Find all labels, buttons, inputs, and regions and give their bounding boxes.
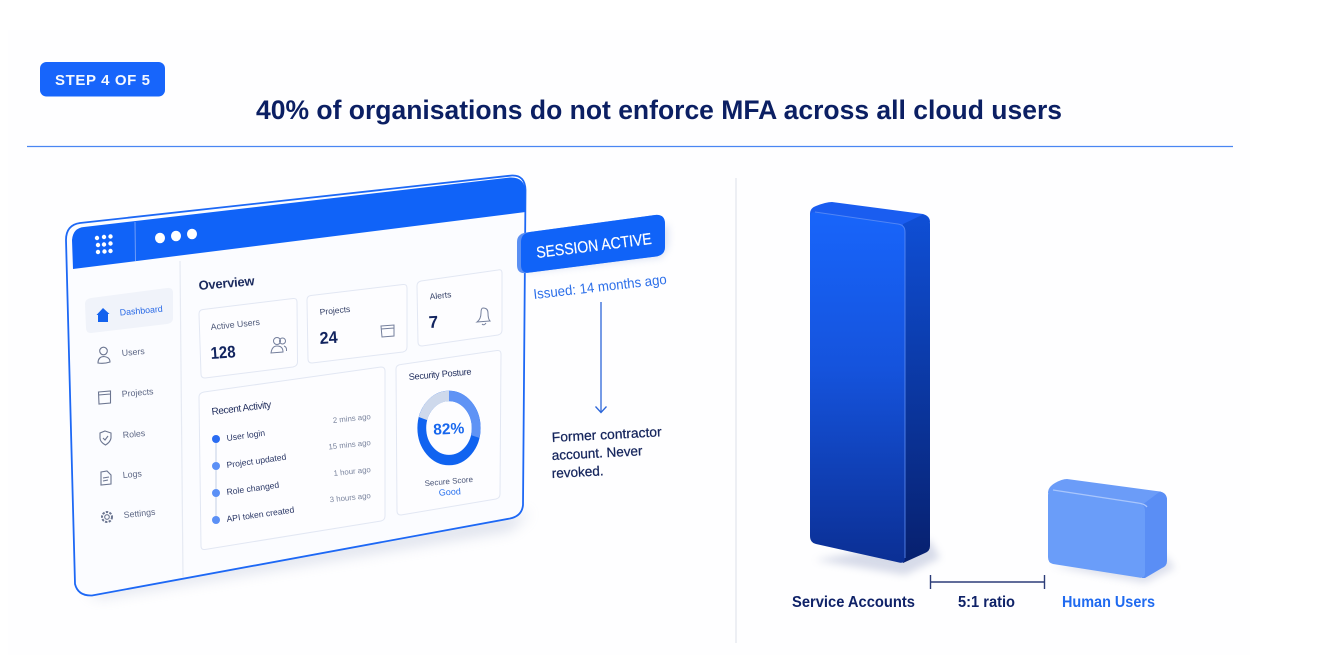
label: service accounts: Service Accounts [792,594,915,611]
card: recent activity [199,367,385,550]
sidebar navigation: Roles [122,428,146,440]
card: security posture: Good [438,486,461,498]
sidebar navigation: Users [121,346,146,358]
sidebar navigation [85,288,173,522]
card: recent activity: Recent Activity [211,400,272,418]
contractor note [551,424,663,481]
bar: human users [1048,479,1175,583]
card: recent activity: 3 hours ago [329,491,372,504]
title: 40% of organisations do not enforce MFA across all cloud users [256,95,1062,125]
icon: user [98,347,110,363]
card: security posture: Security Posture [408,367,472,382]
sidebar navigation: Logs [122,468,143,480]
icon: gear [102,512,112,522]
card: active users: Active Users [210,317,261,332]
arrow [596,302,606,412]
icon: folder [381,325,394,337]
sidebar navigation: Settings [123,507,156,520]
icon: bell [477,308,490,325]
dashboard window frame [66,175,526,596]
card: security posture: Secure Score [424,475,474,488]
card: recent activity: 1 hour ago [333,465,372,478]
contractor note: account. Never [551,443,643,463]
dashboard header bar [72,177,526,269]
heading: overview: Overview [198,273,256,293]
icon: home [96,308,110,322]
icon: users [271,338,287,353]
bar chart [792,202,1175,611]
step badge [40,62,165,96]
card: projects: Projects [319,304,351,317]
panel: dashboard mockup [66,175,530,597]
card: projects: 24 [319,328,339,348]
icon: folder [98,391,110,404]
card: recent activity: API token created [226,505,295,524]
ratio bracket [930,575,1044,589]
donut chart [422,396,476,460]
label: human users: Human Users [1062,594,1155,611]
session active badge: SESSION ACTIVE [535,231,653,262]
card: active users: 128 [210,342,236,363]
contractor note: Former contractor [551,424,663,445]
card: alerts [417,270,502,346]
icon: shield [100,431,111,445]
card: alerts: 7 [428,313,439,332]
sidebar navigation: Dashboard [119,304,163,317]
card: recent activity: Role changed [226,480,280,497]
card: recent activity: 2 mins ago [332,412,372,425]
card: security posture: 82% [433,420,465,439]
card: recent activity: 15 mins ago [328,438,372,451]
session active badge [517,215,668,273]
icon: document [101,471,111,485]
issued text: Issued: 14 months ago [533,271,668,302]
card: active users [199,298,298,378]
card: security posture [396,350,501,515]
sidebar navigation: Projects [121,386,154,399]
card: projects [307,284,407,363]
card: recent activity: User login [226,428,266,443]
card: alerts: Alerts [429,289,452,301]
label: ratio: 5:1 ratio [958,594,1015,611]
contractor note: revoked. [551,463,604,481]
step badge: STEP 4 OF 5 [55,72,150,89]
card: recent activity: Project updated [226,452,287,470]
bar: service accounts [810,202,940,575]
